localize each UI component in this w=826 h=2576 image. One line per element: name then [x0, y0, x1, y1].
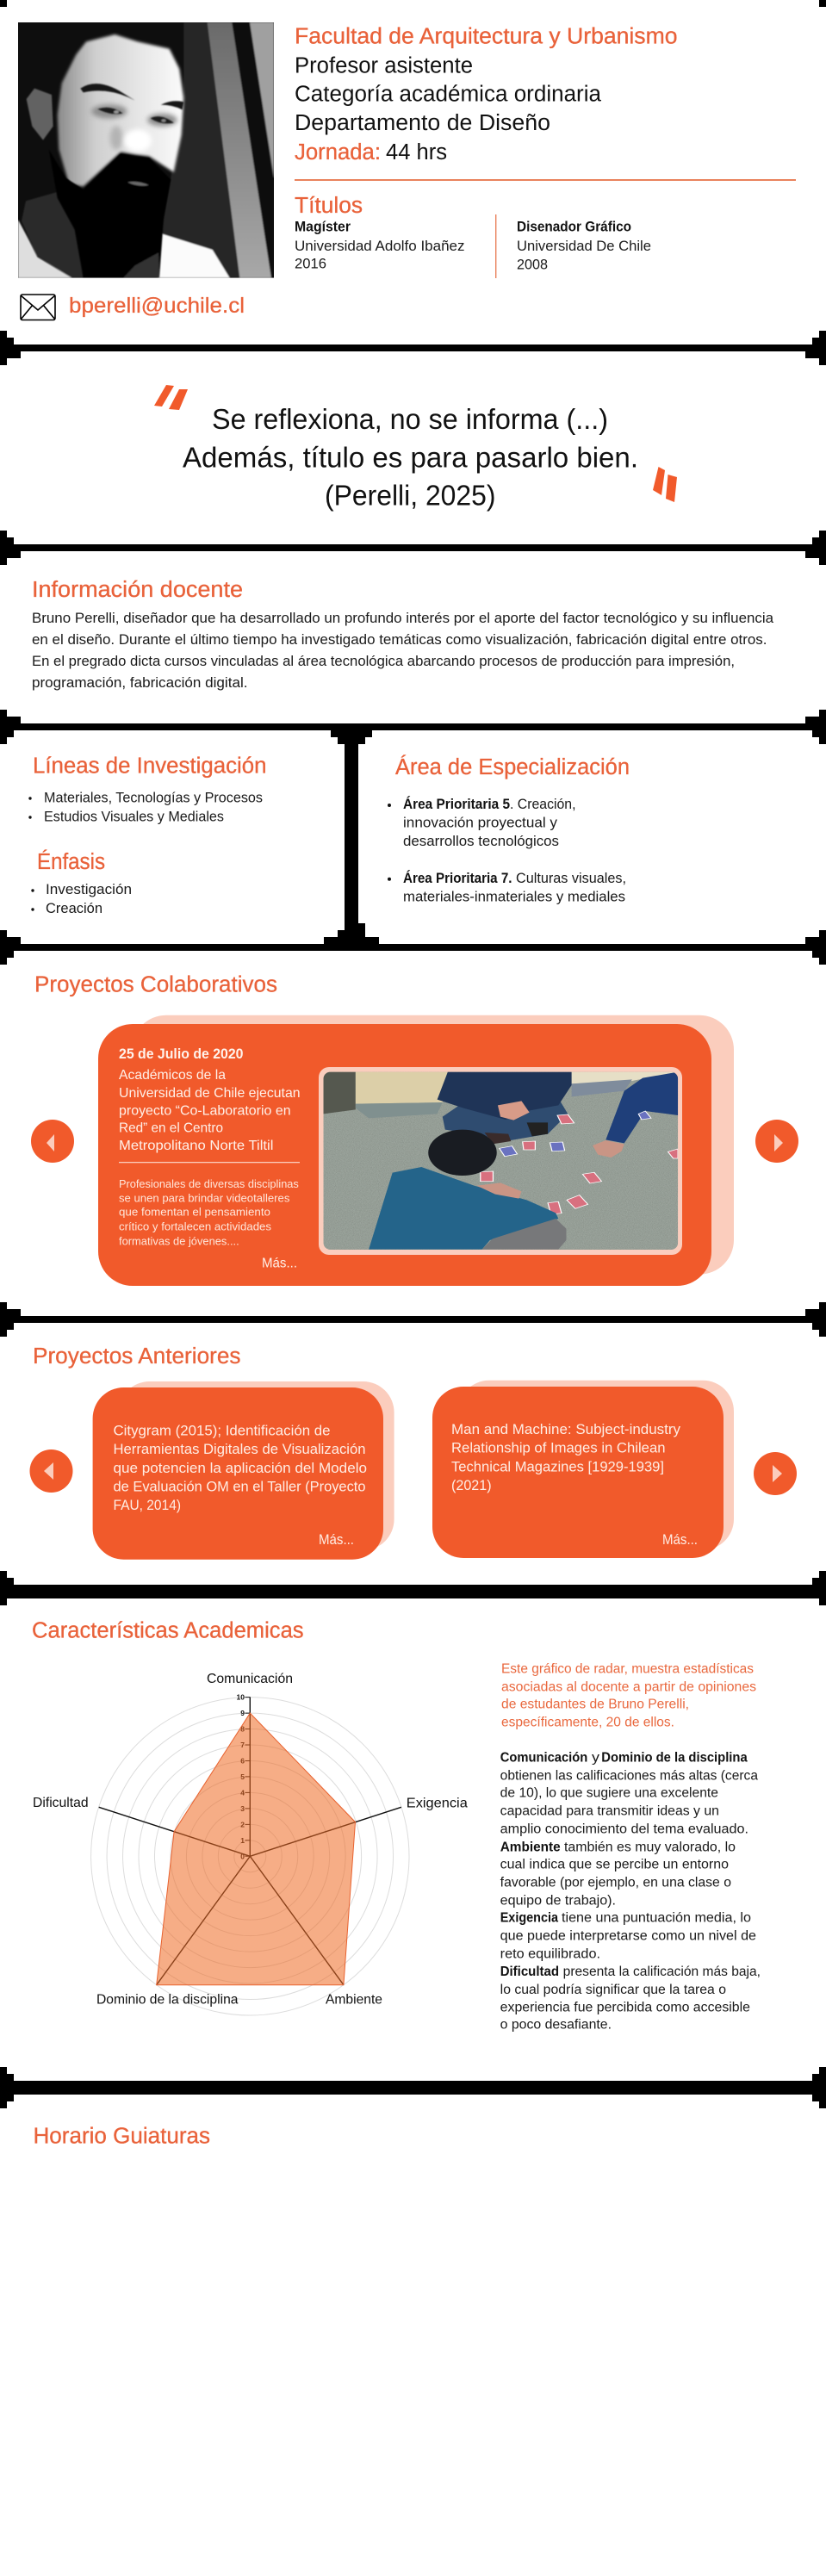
axis labels: Dominio de la disciplina	[96, 1993, 239, 2008]
quote text: Se reflexiona, no se informa (...)	[212, 403, 608, 435]
panel: información docente	[32, 578, 774, 691]
text block: magíster: 2016	[295, 257, 326, 272]
text block: project description: que fomentan el pensamiento	[119, 1206, 270, 1219]
list: área prioritaria 7	[388, 870, 626, 905]
list: área prioritaria 7: Culturas visuales,	[516, 871, 626, 886]
email address: bperelli@uchile.cl	[69, 294, 245, 318]
text block: bio: en el diseño. Durante el último tiempo ha investigado temáticas como visualización, fabricación digital entre otros.	[32, 632, 767, 648]
text block: radar analysis: amplio conocimiento del tema evaluado.	[500, 1822, 748, 1837]
text block: diseñador gráfico: Disenador Gráfico	[517, 220, 631, 235]
quote text: (Perelli, 2025)	[325, 480, 496, 512]
axis scale labels: 5	[240, 1772, 245, 1781]
axis labels: Dificultad	[33, 1796, 89, 1810]
text block: radar analysis: experiencia fue percibida como accesible	[500, 2001, 750, 2015]
card: man and machine: Más...	[662, 1532, 698, 1548]
text block: bio: Bruno Perelli, diseñador que ha desarrollado un profundo interés por el aporte del factor tecnológico y su influencia	[32, 611, 774, 626]
quote text	[183, 403, 638, 512]
heading: proyectos colaborativos: Proyectos Colaborativos	[34, 973, 277, 997]
text block: project title: Metropolitano Norte Tiltil	[119, 1139, 273, 1153]
data polygon	[157, 1713, 355, 1985]
axis labels: Exigencia	[407, 1797, 468, 1811]
top corner marks	[0, 0, 826, 7]
heading: características académicas: Características Academicas	[32, 1619, 304, 1643]
text block: diseñador gráfico: Universidad De Chile	[517, 239, 651, 254]
axis scale labels: 4	[240, 1788, 245, 1797]
card: man and machine: Man and Machine: Subject-industry	[451, 1422, 681, 1437]
card: citygram	[93, 1381, 394, 1560]
icon: left arrow	[29, 1449, 72, 1493]
text block: project title: Red” en el Centro	[119, 1121, 223, 1136]
icon: right arrow	[755, 1120, 798, 1163]
title: faculty and position	[295, 25, 677, 164]
card: man and machine	[432, 1381, 734, 1558]
title: faculty and position: Categoría académica ordinaria	[295, 83, 602, 107]
text block: diseñador gráfico	[517, 220, 651, 273]
text block: radar analysis: favorable (por ejemplo, en una clase o	[500, 1876, 731, 1890]
axis scale labels	[237, 1693, 245, 1860]
text block: radar analysis: equipo de trabajo).	[500, 1894, 616, 1909]
card: man and machine: Technical Magazines [1929-1939]	[451, 1460, 664, 1475]
list: énfasis: Creación	[46, 901, 102, 916]
text block: bio: En el pregrado dicta cursos vinculadas al área tecnológica abarcando procesos de producción para impresión,	[32, 654, 735, 669]
text block: radar analysis: lo cual podría significar que la tarea o	[500, 1983, 726, 1997]
text block: radar analysis	[500, 1751, 761, 2033]
card: citygram: Herramientas Digitales de Visualización	[114, 1442, 365, 1457]
heading: área de especialización: Área de Especialización	[395, 754, 630, 779]
list: área prioritaria 7: Área Prioritaria 7.	[403, 870, 512, 886]
axis scale labels: 6	[240, 1757, 245, 1766]
list: área prioritaria 5	[388, 796, 575, 849]
axis scale labels: 3	[240, 1804, 245, 1813]
card: man and machine: Relationship of Images in Chilean	[451, 1441, 665, 1456]
text block: radar intro: específicamente, 20 de ellos.	[501, 1716, 674, 1730]
axis scale labels: 0	[240, 1852, 245, 1860]
text block: radar analysis: Dominio de la disciplina	[601, 1751, 748, 1766]
icon: right arrow	[754, 1452, 797, 1495]
axis scale labels: 9	[240, 1709, 245, 1717]
title: faculty and position: 44 hrs	[386, 140, 447, 164]
text block: radar analysis: obtienen las calificaciones más altas (cerca	[500, 1768, 758, 1783]
link: más: Más...	[262, 1257, 297, 1271]
card: citygram: Citygram (2015); Identificación de	[114, 1424, 331, 1439]
card: citygram: Más...	[319, 1532, 354, 1548]
heading: información docente: Información docente	[32, 578, 243, 602]
text block: radar intro: Este gráfico de radar, muestra estadísticas	[501, 1662, 754, 1677]
title: faculty and position: Profesor asistente	[295, 54, 473, 78]
heading: líneas de investigación: Líneas de Investigación	[33, 754, 267, 779]
text block: radar analysis: tiene una puntuación media, lo	[562, 1911, 751, 1926]
icon: envelope	[21, 295, 55, 320]
text block: project title	[119, 1068, 301, 1153]
photo: students playing cards on the floor	[324, 1072, 678, 1250]
heading: horario guiaturas: Horario Guiaturas	[33, 2125, 210, 2149]
card: man and machine: (2021)	[451, 1478, 492, 1493]
text block: project description: crítico y fortalecen actividades	[119, 1220, 272, 1233]
card: citygram: de Evaluación OM en el Taller (Proyecto	[114, 1480, 365, 1495]
text block: radar intro: de estudantes de Bruno Perelli,	[501, 1697, 689, 1711]
heading: proyectos anteriores: Proyectos Anteriores	[33, 1344, 241, 1369]
text block: radar analysis: y	[592, 1751, 599, 1766]
text block: radar analysis: cual indica que se percibe un entorno	[500, 1858, 729, 1872]
text block: radar analysis: que puede interpretarse como un nivel de	[500, 1929, 756, 1944]
icon: opening quote mark	[154, 385, 188, 410]
list: área prioritaria 5: Área Prioritaria 5	[403, 796, 510, 812]
list: líneas: Estudios Visuales y Mediales	[44, 810, 224, 825]
list: área prioritaria 5: . Creación,	[510, 797, 575, 812]
heading: títulos: Títulos	[295, 194, 363, 218]
heading: énfasis: Énfasis	[37, 849, 105, 874]
list: área prioritaria 5: desarrollos tecnológicos	[403, 834, 559, 849]
photo: portrait of Bruno Perelli	[18, 22, 274, 278]
title: faculty and position: Departamento de Diseño	[295, 111, 550, 135]
text block: project title: Universidad de Chile ejecutan	[119, 1086, 301, 1101]
panel: área de especialización	[388, 754, 630, 905]
text block: radar analysis: también es muy valorado, lo	[564, 1840, 736, 1855]
icon: left arrow	[31, 1120, 74, 1163]
radar chart	[33, 1672, 468, 2015]
axis scale labels: 8	[240, 1724, 245, 1733]
list: líneas	[28, 791, 263, 825]
text block: radar analysis: capacidad para transmitir ideas y un	[500, 1803, 719, 1818]
list: área prioritaria 7: materiales-inmateriales y mediales	[403, 890, 625, 905]
list: líneas: Materiales, Tecnologías y Procesos	[44, 791, 263, 806]
card: citygram: que potencien la aplicación del Modelo	[114, 1461, 367, 1476]
text block: magíster	[295, 220, 465, 272]
list: área prioritaria 5: innovación proyectual y	[403, 816, 558, 831]
axis labels	[33, 1672, 468, 2008]
text block: bio: programación, fabricación digital.	[32, 675, 248, 691]
text block: project description: se unen para brindar videotalleres	[119, 1192, 290, 1205]
panel: títulos	[295, 194, 651, 278]
text block: radar analysis: Comunicación	[500, 1751, 587, 1766]
list: énfasis: Investigación	[46, 882, 132, 897]
text block: project description: Profesionales de diversas disciplinas	[119, 1177, 299, 1190]
axis scale labels: 7	[240, 1741, 245, 1749]
text block: magíster: Universidad Adolfo Ibañez	[295, 239, 465, 254]
callout: quote	[154, 385, 677, 512]
text block: radar analysis: o poco desafiante.	[500, 2018, 612, 2033]
text block: radar analysis: de 10), lo que sugiere una excelente	[500, 1786, 718, 1801]
axis scale labels: 1	[240, 1836, 245, 1845]
text block: diseñador gráfico: 2008	[517, 258, 548, 273]
text block: bio	[32, 611, 774, 691]
axis scale labels: 10	[237, 1693, 245, 1702]
title: faculty and position: Facultad de Arquitectura y Urbanismo	[295, 25, 677, 49]
text block: radar analysis: Dificultad	[500, 1965, 559, 1979]
card: citygram: FAU, 2014)	[114, 1498, 181, 1513]
text block: radar analysis: presenta la calificación más baja,	[563, 1965, 761, 1979]
card: proyecto colaborativo	[98, 1024, 711, 1286]
axis scale labels: 2	[240, 1820, 245, 1828]
text block: radar analysis: reto equilibrado.	[500, 1947, 600, 1962]
panel: carrusel proyectos anteriores	[29, 1381, 797, 1560]
text block: project title: Académicos de la	[119, 1068, 226, 1083]
axis labels: Ambiente	[326, 1993, 382, 2008]
icon: closing quote mark	[653, 467, 677, 502]
text block: radar analysis: Ambiente	[500, 1840, 561, 1855]
text block: project description	[119, 1177, 299, 1248]
panel: carrusel proyectos colaborativos	[31, 1015, 798, 1286]
panel: líneas de investigación y énfasis	[28, 754, 267, 916]
text block: magíster: Magíster	[295, 220, 351, 235]
date: 25 de Julio de 2020	[119, 1046, 243, 1062]
text block: radar analysis: Exigencia	[500, 1911, 558, 1926]
text block: project title: proyecto “Co-Laboratorio en	[119, 1104, 291, 1119]
axis labels: Comunicación	[207, 1672, 293, 1686]
list: énfasis	[31, 882, 132, 916]
text block: project description: formativas de jóvenes....	[119, 1235, 239, 1248]
text block: radar intro: asociadas al docente a partir de opiniones	[501, 1679, 756, 1694]
title: faculty and position: Jornada:	[295, 140, 381, 164]
quote text: Además, título es para pasarlo bien.	[183, 442, 638, 474]
text block: radar intro	[501, 1662, 756, 1730]
